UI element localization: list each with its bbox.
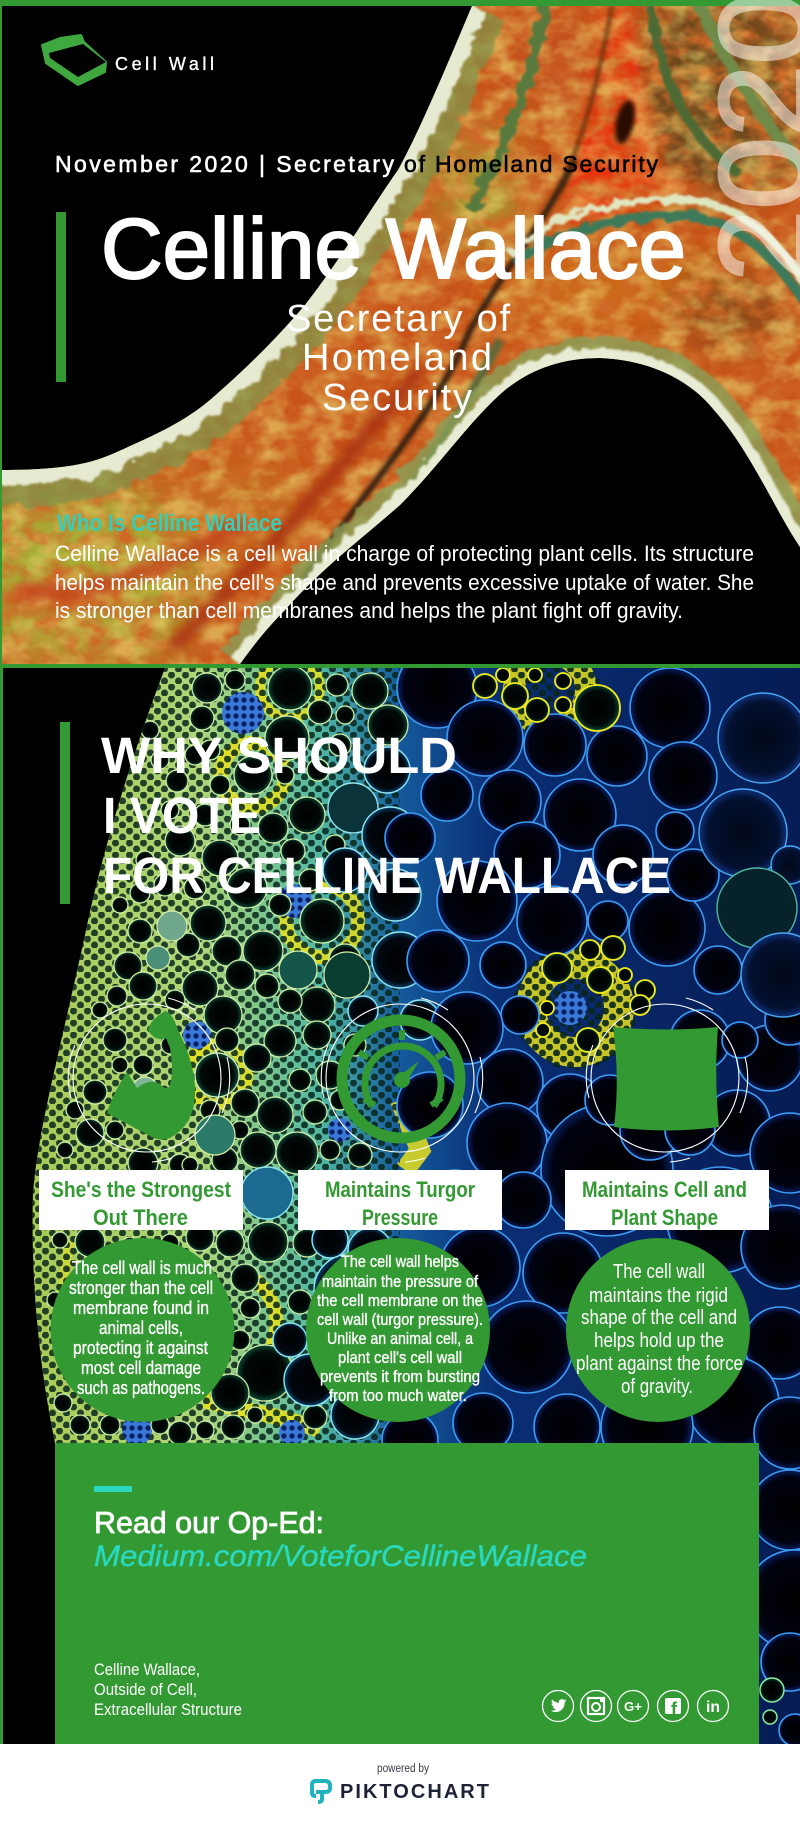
- panel: cell and plant shape: The cell wall: [613, 1261, 705, 1283]
- title box: [298, 1170, 502, 1230]
- green accent bar beside name: [56, 212, 66, 382]
- panel: cell and plant shape: Maintains Cell and: [582, 1177, 747, 1202]
- panel: strongest: Out There: [93, 1205, 188, 1230]
- icon: instagram: [580, 1690, 612, 1722]
- section heading: [101, 727, 671, 904]
- green accent bar beside question: [60, 722, 70, 904]
- powered by label: powered by: [377, 1763, 429, 1775]
- background photo: orange cell wall micrograph: [0, 0, 800, 664]
- date and office line: of Homeland Security: [404, 151, 658, 177]
- icon: linkedin: in: [706, 1699, 720, 1716]
- description circle: [306, 1238, 490, 1422]
- address block: Outside of Cell,: [94, 1681, 197, 1699]
- intro paragraph: is stronger than cell membranes and helps the plant fight off gravity.: [55, 598, 683, 623]
- intro paragraph: helps maintain the cell's shape and prevents excessive uptake of water. She: [55, 570, 754, 595]
- panel: op-ed call to action: [55, 1443, 759, 1744]
- subtitle: Secretary of: [286, 298, 510, 340]
- candidate name: Celline Wallace: [101, 202, 686, 297]
- logo: green hexagon with Cell Wall wordmark: Cell Wall: [115, 54, 214, 74]
- panel: turgor pressure: maintain the pressure of: [322, 1273, 478, 1291]
- icon: facebook: [658, 1690, 688, 1722]
- panel: cell and plant shape: maintains the rigid: [589, 1285, 728, 1307]
- panel: turgor pressure: [298, 1170, 502, 1422]
- background photo: plant stem cross section: [0, 640, 800, 1746]
- panel: strongest: The cell wall is much: [72, 1258, 212, 1278]
- panel: turgor pressure: cell wall (turgor pressure).: [317, 1311, 483, 1329]
- op-ed heading: Read our Op-Ed:: [94, 1505, 324, 1540]
- icon: linkedin: [698, 1690, 728, 1722]
- date and office line: [55, 151, 658, 177]
- panel: strongest: animal cells,: [99, 1318, 183, 1338]
- footer white strip: [0, 1744, 800, 1824]
- piktochart logo: PIKTOCHART: [340, 1781, 489, 1803]
- panel: cell and plant shape: of gravity.: [621, 1376, 693, 1398]
- title box: [565, 1170, 769, 1230]
- panel: turgor pressure: The cell wall helps: [341, 1253, 459, 1271]
- icon: google plus: G+: [624, 1699, 642, 1714]
- icon: facebook: f: [671, 1699, 678, 1719]
- section heading: WHY SHOULD: [101, 727, 457, 784]
- icon: google plus: [618, 1690, 648, 1722]
- icon: twitter: [542, 1690, 574, 1722]
- panel: turgor pressure: Pressure: [362, 1205, 438, 1230]
- address block: Celline Wallace,: [94, 1661, 200, 1679]
- panel: turgor pressure: the cell membrane on the: [317, 1292, 483, 1310]
- panel: cell and plant shape: Plant Shape: [611, 1205, 718, 1230]
- cyan dash: [94, 1486, 132, 1492]
- panel: strongest: [39, 1170, 243, 1422]
- panel: cell and plant shape: helps hold up the: [594, 1330, 724, 1352]
- left edge line: [0, 6, 2, 664]
- panel: strongest: stronger than the cell: [69, 1278, 213, 1298]
- op-ed link: Medium.com/VoteforCellineWallace: [94, 1540, 587, 1573]
- icon: pressure gauge: [321, 998, 483, 1162]
- section heading: FOR CELLINE WALLACE: [103, 847, 671, 904]
- panel: strongest: protecting it against: [73, 1338, 208, 1358]
- intro paragraph: Celline Wallace is a cell wall in charge of protecting plant cells. Its structure: [55, 541, 754, 566]
- panel: cell and plant shape: plant against the force: [576, 1353, 743, 1375]
- icon: flexed arm: [68, 998, 230, 1162]
- date and office line: November 2020 | Secretary: [55, 151, 394, 177]
- panel: turgor pressure: plant cell's cell wall: [338, 1349, 462, 1367]
- panel: cell and plant shape: [565, 1170, 769, 1422]
- subtitle: Homeland: [302, 337, 492, 379]
- panel: strongest: She's the Strongest: [51, 1177, 232, 1202]
- panel: cell and plant shape: shape of the cell and: [581, 1307, 737, 1329]
- subtitle: [286, 298, 510, 419]
- panel: strongest: membrane found in: [73, 1298, 209, 1318]
- panel: turgor pressure: Maintains Turgor: [325, 1177, 475, 1202]
- top green bar: [0, 0, 800, 6]
- panel: turgor pressure: prevents it from bursting: [320, 1368, 480, 1386]
- section heading: I VOTE: [103, 787, 261, 844]
- address block: Extracellular Structure: [94, 1701, 242, 1719]
- subtitle: Security: [322, 377, 472, 419]
- panel: turgor pressure: Unlike an animal cell, a: [327, 1330, 474, 1348]
- icon: square cell: [586, 998, 748, 1162]
- address block: [94, 1661, 242, 1719]
- green section divider: [0, 664, 800, 668]
- panel: strongest: most cell damage: [81, 1358, 201, 1378]
- left edge line lower section: [0, 668, 3, 1744]
- panel: turgor pressure: from too much water.: [329, 1387, 467, 1405]
- panel: strongest: such as pathogens.: [77, 1378, 205, 1398]
- description circle: [566, 1238, 750, 1422]
- description circle: [50, 1238, 234, 1422]
- intro paragraph: [55, 541, 754, 623]
- title box: [39, 1170, 243, 1230]
- logo: green hexagon with Cell Wall wordmark: [42, 35, 214, 85]
- who is heading: Who Is Celline Wallace: [57, 510, 282, 537]
